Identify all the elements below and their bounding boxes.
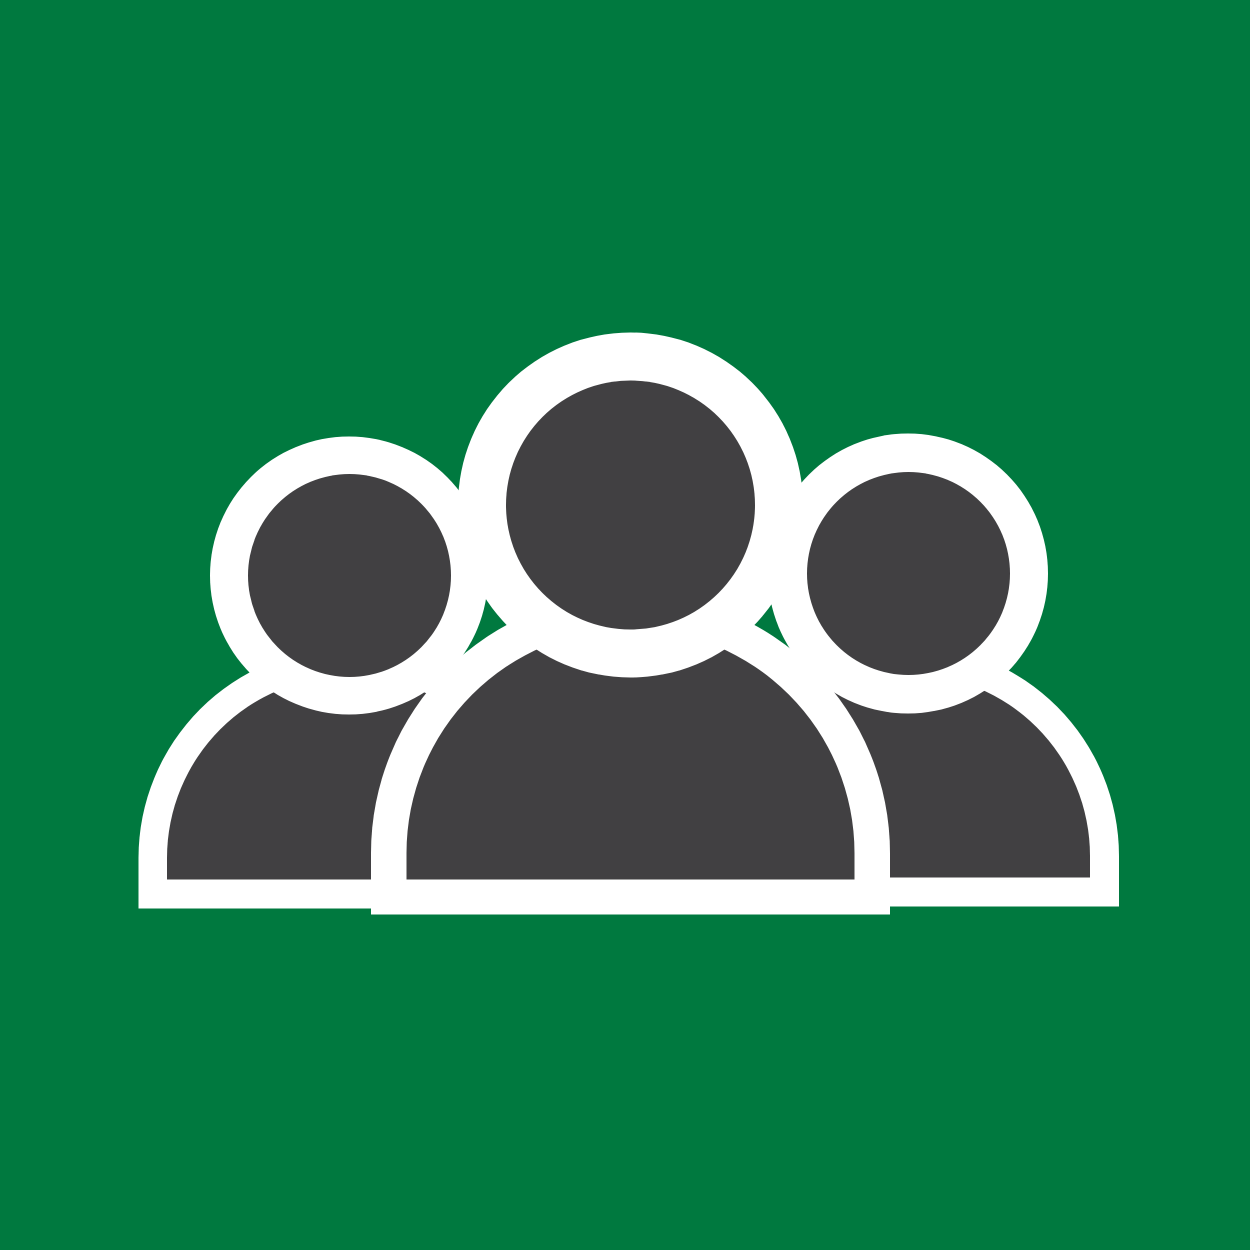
icon: left person [138, 436, 560, 908]
icon: center person [371, 332, 890, 914]
icon: right person [697, 434, 1119, 906]
